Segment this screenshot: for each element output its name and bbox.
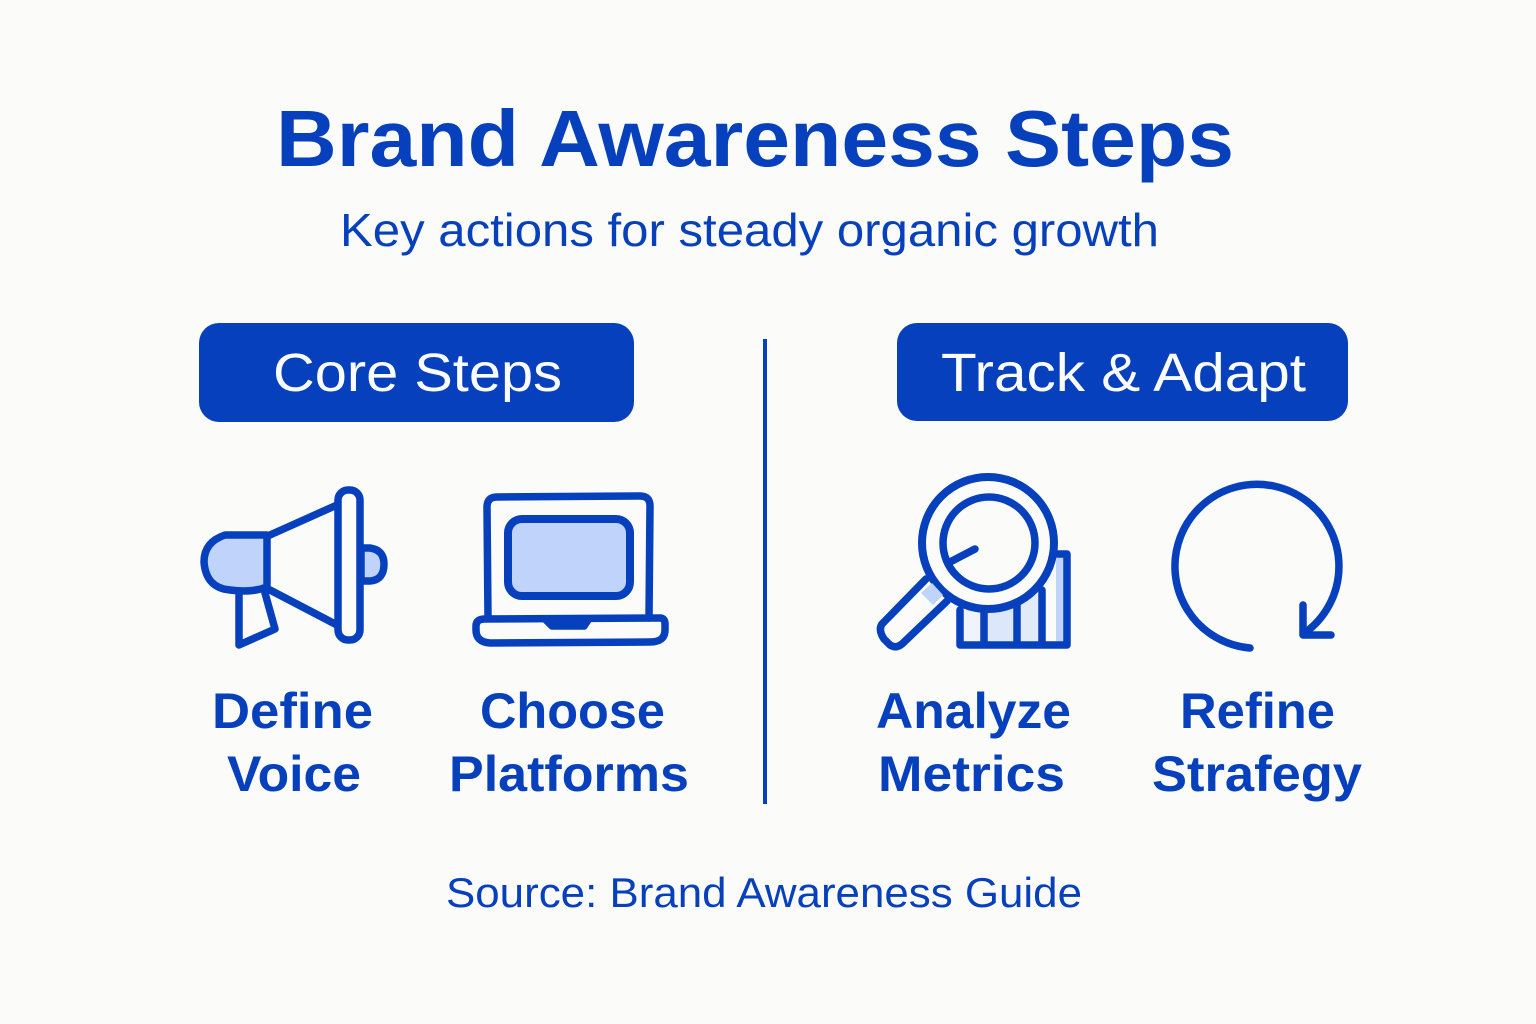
label: define voice: Define xyxy=(212,683,373,739)
heading: track and adapt pill: Track & Adapt xyxy=(941,343,1306,403)
label: define voice xyxy=(212,683,373,802)
subtitle: Key actions for steady organic growth xyxy=(340,204,1159,256)
label: refine strategy xyxy=(1152,683,1362,802)
icon: megaphone xyxy=(204,490,384,645)
panel: core steps xyxy=(199,323,689,802)
label: refine strategy: Strafegy xyxy=(1152,746,1362,802)
icon: laptop xyxy=(476,496,665,643)
label: choose platforms xyxy=(449,683,689,802)
label: analyze metrics xyxy=(876,683,1071,802)
source note: Source: Brand Awareness Guide xyxy=(446,869,1082,916)
heading: core steps pill: Core Steps xyxy=(273,343,562,403)
title: Brand Awareness Steps xyxy=(276,94,1234,183)
label: refine strategy: Refine xyxy=(1180,683,1335,739)
icon: refresh arrow xyxy=(1175,484,1339,648)
label: define voice: Voice xyxy=(227,746,361,802)
center divider xyxy=(763,339,767,804)
label: choose platforms: Choose xyxy=(480,683,665,739)
panel: track and adapt xyxy=(876,323,1362,802)
heading: track and adapt pill xyxy=(897,323,1348,421)
label: analyze metrics: Metrics xyxy=(878,746,1065,802)
icon: magnifier over bar chart xyxy=(880,477,1067,647)
label: analyze metrics: Analyze xyxy=(876,683,1071,739)
heading: core steps pill xyxy=(199,323,634,422)
label: choose platforms: Platforms xyxy=(449,746,689,802)
